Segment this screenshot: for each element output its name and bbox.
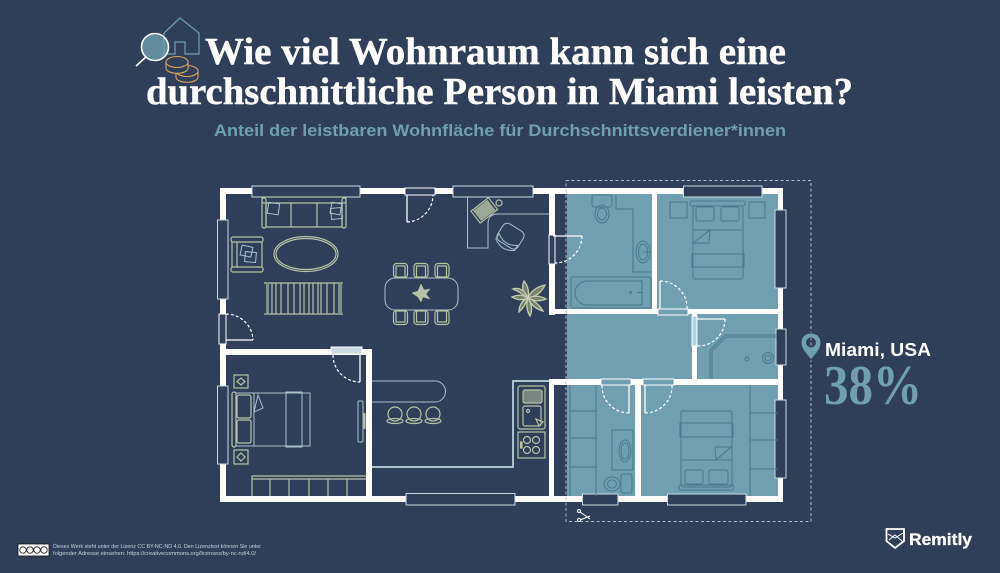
license text: folgender Adresse einsehen: https://creativecommons.org/licenses/by-nc-nd/4.0/ <box>53 551 256 557</box>
armchair <box>231 237 263 272</box>
bathroom fixtures lower <box>570 385 633 496</box>
affordable area dashed outline <box>566 180 811 522</box>
affordable area highlight <box>567 194 778 496</box>
dark gap between wall and highlight <box>554 194 567 496</box>
floor plan walls <box>220 188 783 502</box>
icon: location pin <box>801 333 821 360</box>
kitchen sink and stove <box>518 386 545 458</box>
license badge <box>18 544 49 556</box>
Remitly logo <box>886 529 973 549</box>
potted plant <box>512 281 546 316</box>
Remitly logo: Remitly <box>909 531 973 549</box>
bedroom lower right <box>679 385 778 496</box>
license text: Dieses Werk steht unter der Lizenz CC BY-NC-ND 4.0. Den Lizenztext können Sie unter <box>53 544 261 550</box>
sofa <box>262 197 346 228</box>
doors <box>219 188 725 413</box>
bathroom fixtures upper <box>571 195 651 308</box>
icon: scissors <box>578 510 590 522</box>
subtitle: Anteil der leistbaren Wohnfläche für Durchschnittsverdiener*innen <box>214 122 786 140</box>
title <box>146 31 853 113</box>
dining table with chairs <box>385 264 458 324</box>
windows <box>218 186 786 505</box>
location label: Miami, USA <box>825 340 931 360</box>
title: Wie viel Wohnraum kann sich eine <box>205 31 786 73</box>
kitchen counter and bar <box>372 381 549 467</box>
oval rug <box>274 236 338 272</box>
title: durchschnittliche Person in Miami leisten? <box>146 71 853 113</box>
percentage: 38% <box>824 355 922 417</box>
location callout: Miami, USA 38% <box>801 333 931 417</box>
shower <box>710 335 777 379</box>
bedroom upper right <box>670 201 765 279</box>
license text <box>53 544 261 557</box>
desk with laptop and chair <box>468 197 549 254</box>
striped rug <box>264 283 343 314</box>
bedroom left <box>232 375 366 496</box>
icon: house, magnifier and coins <box>136 18 199 82</box>
